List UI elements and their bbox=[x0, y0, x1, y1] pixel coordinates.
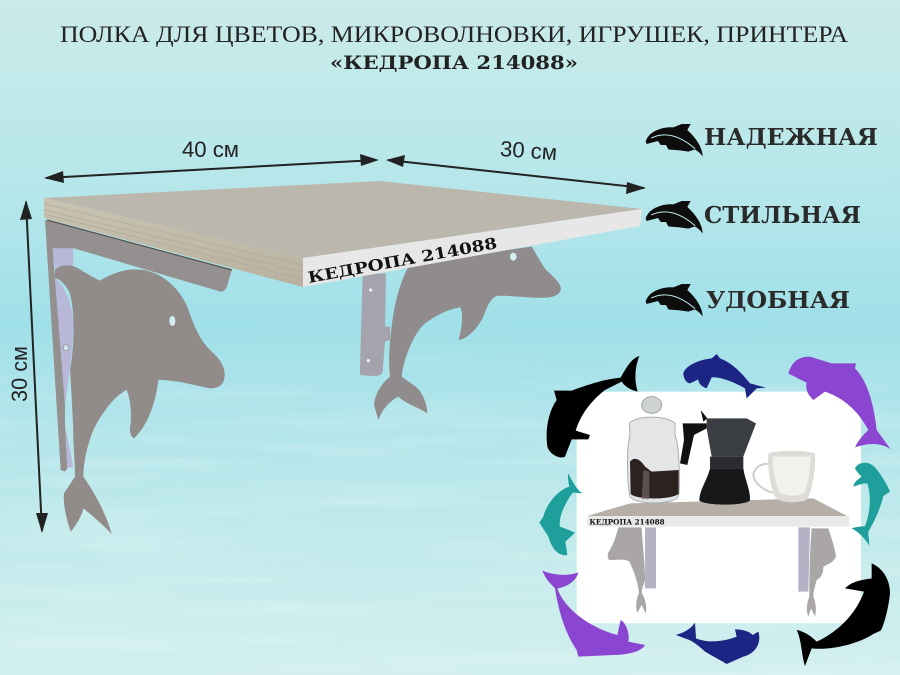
dolphin: purple bottom left bbox=[542, 571, 645, 657]
dolphin: navy top bbox=[683, 354, 766, 398]
photo shelf: КЕДРОПА 214088 bbox=[589, 517, 665, 526]
photo panel with dolphin frame bbox=[539, 354, 891, 666]
dimension: height 30 cm bbox=[7, 200, 48, 533]
icon: dolphin bbox=[646, 284, 703, 317]
title: ПОЛКА ДЛЯ ЦВЕТОВ, МИКРОВОЛНОВКИ, ИГРУШЕК, ПРИНТЕРА bbox=[60, 22, 848, 47]
white photo background bbox=[577, 392, 861, 623]
moka pot bbox=[680, 410, 756, 505]
shelf left edge bbox=[44, 198, 303, 287]
dimension: width 40 cm: 40 см bbox=[182, 137, 239, 162]
icon: dolphin bbox=[646, 124, 703, 157]
dolphin: navy bottom bbox=[676, 623, 759, 664]
near bracket arm and plate bbox=[45, 220, 232, 472]
near dolphin bracket bbox=[55, 265, 225, 534]
far bracket plate bbox=[360, 273, 390, 376]
feature: convenient: УДОБНАЯ bbox=[706, 287, 850, 314]
shelf front edge bbox=[303, 209, 642, 287]
dolphin: teal right bbox=[852, 463, 890, 546]
dimension: width 40 cm bbox=[44, 137, 379, 183]
shelf top bbox=[44, 181, 642, 258]
feature: reliable bbox=[646, 124, 878, 157]
feature: reliable: НАДЕЖНАЯ bbox=[704, 124, 878, 151]
feature: stylish bbox=[646, 201, 861, 234]
dolphin: purple top right bbox=[788, 357, 891, 449]
dimension: depth 30 cm bbox=[386, 136, 646, 194]
dolphin: black bottom right bbox=[797, 563, 890, 666]
glass cup bbox=[753, 451, 815, 502]
shelf label: КЕДРОПА 214088 bbox=[306, 233, 499, 287]
icon: dolphin bbox=[646, 201, 703, 234]
feature: stylish: СТИЛЬНАЯ bbox=[704, 202, 861, 229]
photo brackets and dolphins bbox=[608, 527, 836, 617]
far dolphin bracket bbox=[374, 247, 561, 420]
shelf with dolphin brackets bbox=[44, 181, 642, 534]
title bbox=[60, 22, 848, 74]
title: «КЕДРОПА 214088» bbox=[330, 52, 578, 74]
photo shelf bbox=[587, 498, 849, 527]
feature: convenient bbox=[646, 284, 850, 317]
dolphin: teal left bbox=[539, 473, 583, 555]
dimension: height 30 cm: 30 см bbox=[7, 346, 32, 402]
coffee jar bbox=[627, 397, 679, 503]
dolphin: black top left bbox=[547, 356, 639, 457]
dimension: depth 30 cm: 30 см bbox=[499, 136, 558, 165]
